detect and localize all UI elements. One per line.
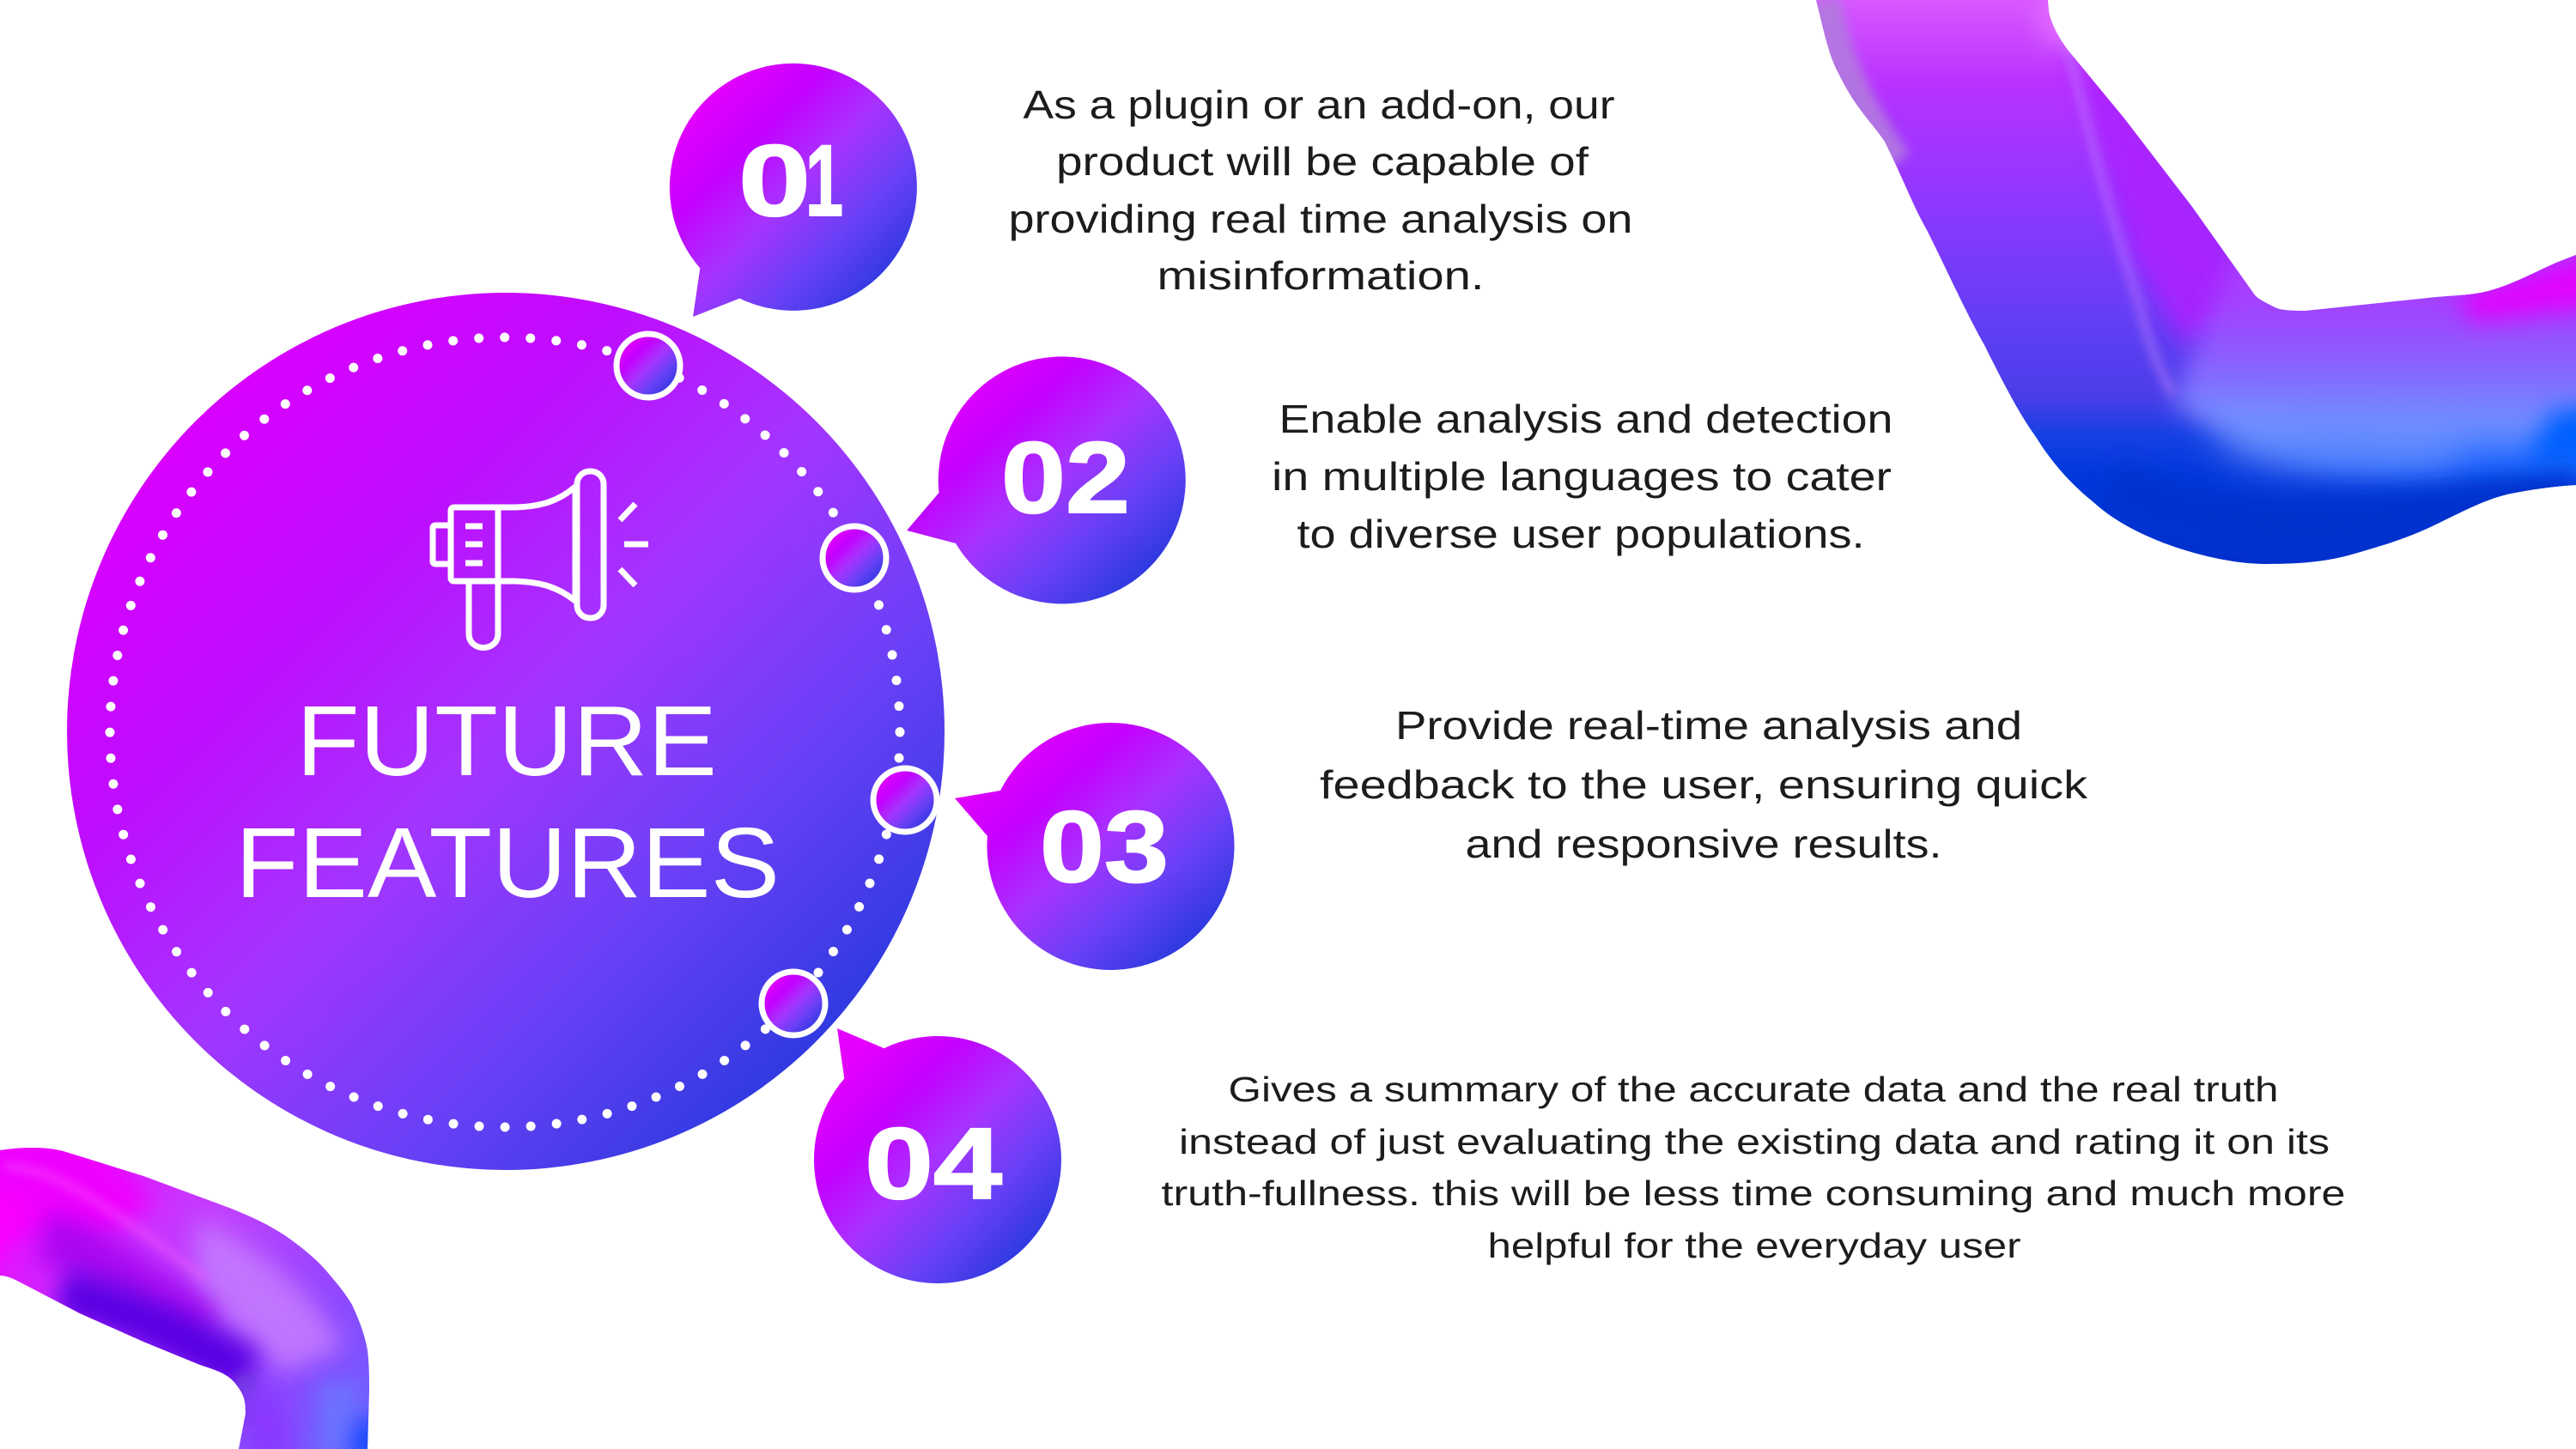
text block 03: feedback to the user, ensuring quick <box>1320 762 2088 807</box>
text block 04: truth-fullness. this will be less time consuming and much more <box>1161 1173 2346 1213</box>
node marker 3 <box>873 768 937 832</box>
text block 01: misinformation. <box>1157 253 1484 298</box>
title: FUTURE <box>296 685 717 797</box>
text block 03: and responsive results. <box>1465 822 1942 866</box>
ribbon: top right <box>1803 0 2576 575</box>
node marker 1 <box>617 334 680 397</box>
bubble 03: 03 <box>1040 791 1169 904</box>
text block 04 <box>1161 1070 2346 1265</box>
panel: future features circle <box>67 293 945 1170</box>
text block 02: in multiple languages to cater <box>1272 454 1892 499</box>
title <box>235 685 780 919</box>
bubble 02 <box>907 356 1186 603</box>
text block 02 <box>1272 397 1893 556</box>
text block 03 <box>1320 703 2088 866</box>
text block 01 <box>1008 82 1633 298</box>
bubble 04: 04 <box>865 1107 1002 1221</box>
node marker 2 <box>823 526 886 590</box>
bubble 03 <box>955 723 1235 970</box>
bubble 01 <box>670 64 917 317</box>
text block 04: helpful for the everyday user <box>1487 1226 2021 1265</box>
title: FEATURES <box>235 807 780 919</box>
text block 04: Gives a summary of the accurate data and the real truth <box>1228 1070 2279 1109</box>
text block 01: product will be capable of <box>1056 139 1589 184</box>
ribbon: bottom left <box>0 1142 378 1449</box>
node marker 4 <box>762 972 825 1035</box>
bubble 02: 02 <box>1001 421 1130 535</box>
text block 04: instead of just evaluating the existing data and rating it on its <box>1179 1122 2330 1161</box>
bubble 01: 1 <box>805 124 843 238</box>
icon: megaphone <box>433 471 648 647</box>
bubble 01: 0 <box>738 124 811 238</box>
text block 02: Enable analysis and detection <box>1279 397 1893 441</box>
text block 02: to diverse user populations. <box>1297 512 1865 556</box>
text block 03: Provide real-time analysis and <box>1395 703 2022 748</box>
bubble 04 <box>814 1028 1061 1283</box>
text block 01: providing real time analysis on <box>1008 197 1633 241</box>
text block 01: As a plugin or an add-on, our <box>1024 82 1614 127</box>
